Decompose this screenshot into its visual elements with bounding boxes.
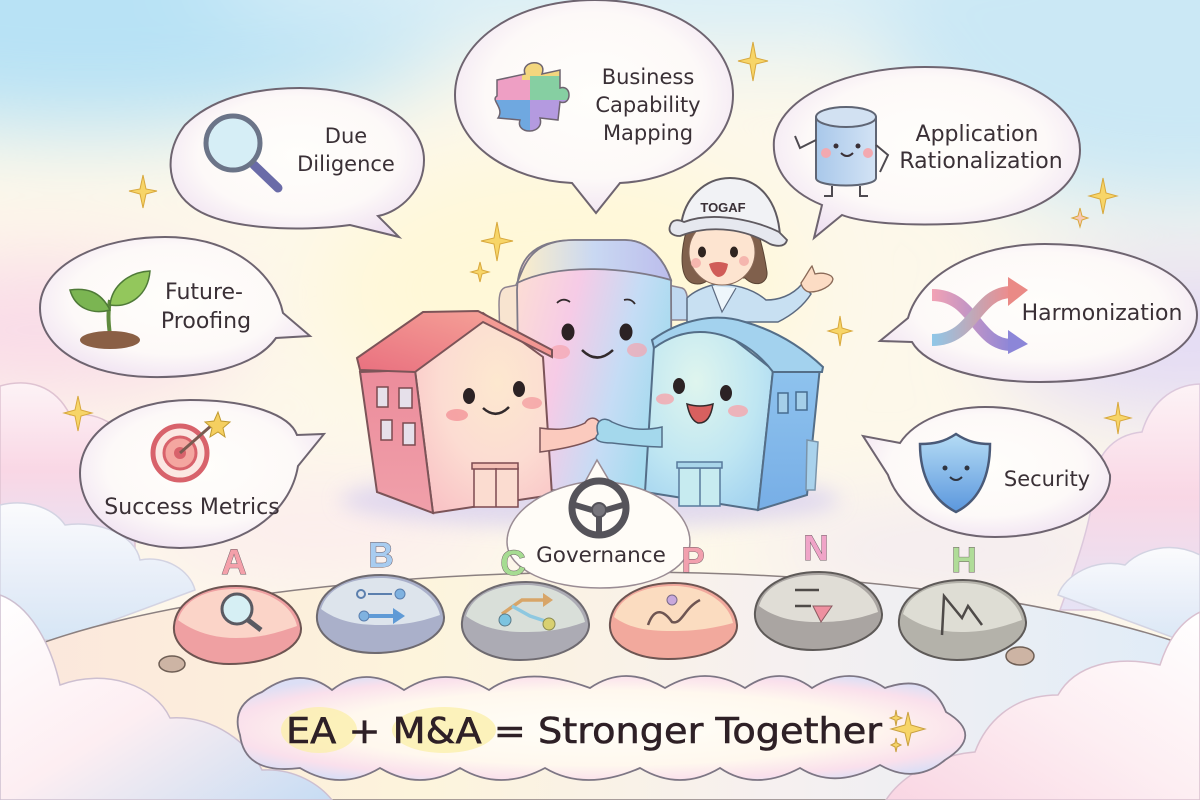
bubble: due diligence [171, 88, 424, 237]
stone B [317, 536, 444, 653]
bubble: business capability mapping [455, 0, 733, 213]
stone H [899, 541, 1026, 660]
bubble: success metrics [80, 400, 324, 548]
bubble: future-proofing: Proofing [161, 309, 251, 334]
stone N: N [803, 529, 829, 568]
hard hat: TOGAF [700, 200, 746, 215]
icon: sparkle [890, 710, 925, 752]
bubble: future-proofing [40, 237, 310, 377]
hand [801, 266, 833, 292]
hair [682, 232, 767, 284]
body and arm [687, 284, 811, 322]
hard hat [669, 178, 787, 246]
label: Application [916, 122, 1038, 147]
icon: target [153, 412, 230, 480]
label: Harmonization [1022, 301, 1182, 326]
highlight: M&A [392, 707, 496, 753]
stone C: C [500, 544, 526, 583]
bubble: harmonization [880, 244, 1197, 382]
stone B: B [368, 536, 394, 575]
label: Security [1004, 467, 1090, 491]
stone A [174, 543, 301, 664]
stone N [755, 529, 882, 650]
icon: crossing arrows [932, 277, 1028, 354]
icon: shield [920, 434, 990, 512]
sparkles [64, 42, 1131, 434]
label: Future- [165, 280, 243, 305]
bubble: security [863, 407, 1110, 537]
bubble: business capability mapping: Mapping [603, 121, 693, 145]
icon: database character [795, 107, 888, 196]
icon: puzzle [494, 62, 570, 132]
shadow under buildings [340, 472, 840, 528]
building: pink [357, 311, 552, 513]
building: blue [645, 318, 823, 510]
headline: EA + M&A = Stronger Together [286, 711, 882, 752]
clouds: bottom corners [0, 595, 1200, 800]
pebbles [159, 647, 1034, 672]
letter stones: A B C P N H [174, 529, 1026, 664]
icon: steering wheel [572, 481, 626, 535]
highlight: EA [281, 707, 357, 753]
bubble: application rationalization [774, 67, 1080, 238]
bubble: application rationalization: Rationalization [899, 149, 1063, 174]
character: TOGAF engineer [669, 178, 833, 322]
ground path [0, 572, 1200, 800]
stone P: P [681, 541, 705, 580]
clouds: left and right side [0, 383, 1200, 650]
stone C [462, 544, 589, 660]
handshake [540, 418, 662, 452]
stone H: H [951, 541, 977, 580]
building: centre [499, 240, 688, 490]
label: Business [602, 65, 694, 89]
stone A: A [221, 543, 247, 582]
banner cloud [238, 676, 965, 780]
label: Success Metrics [104, 495, 280, 520]
label: Due [325, 124, 367, 148]
bubble: business capability mapping: Capability [595, 93, 701, 117]
stone P [610, 541, 737, 659]
face [689, 219, 755, 285]
icon: magnifier [206, 116, 278, 188]
label: Governance [536, 543, 666, 568]
bubble: due diligence: Diligence [297, 152, 395, 176]
icon: sprout [70, 271, 150, 349]
bubble: governance [507, 460, 690, 588]
